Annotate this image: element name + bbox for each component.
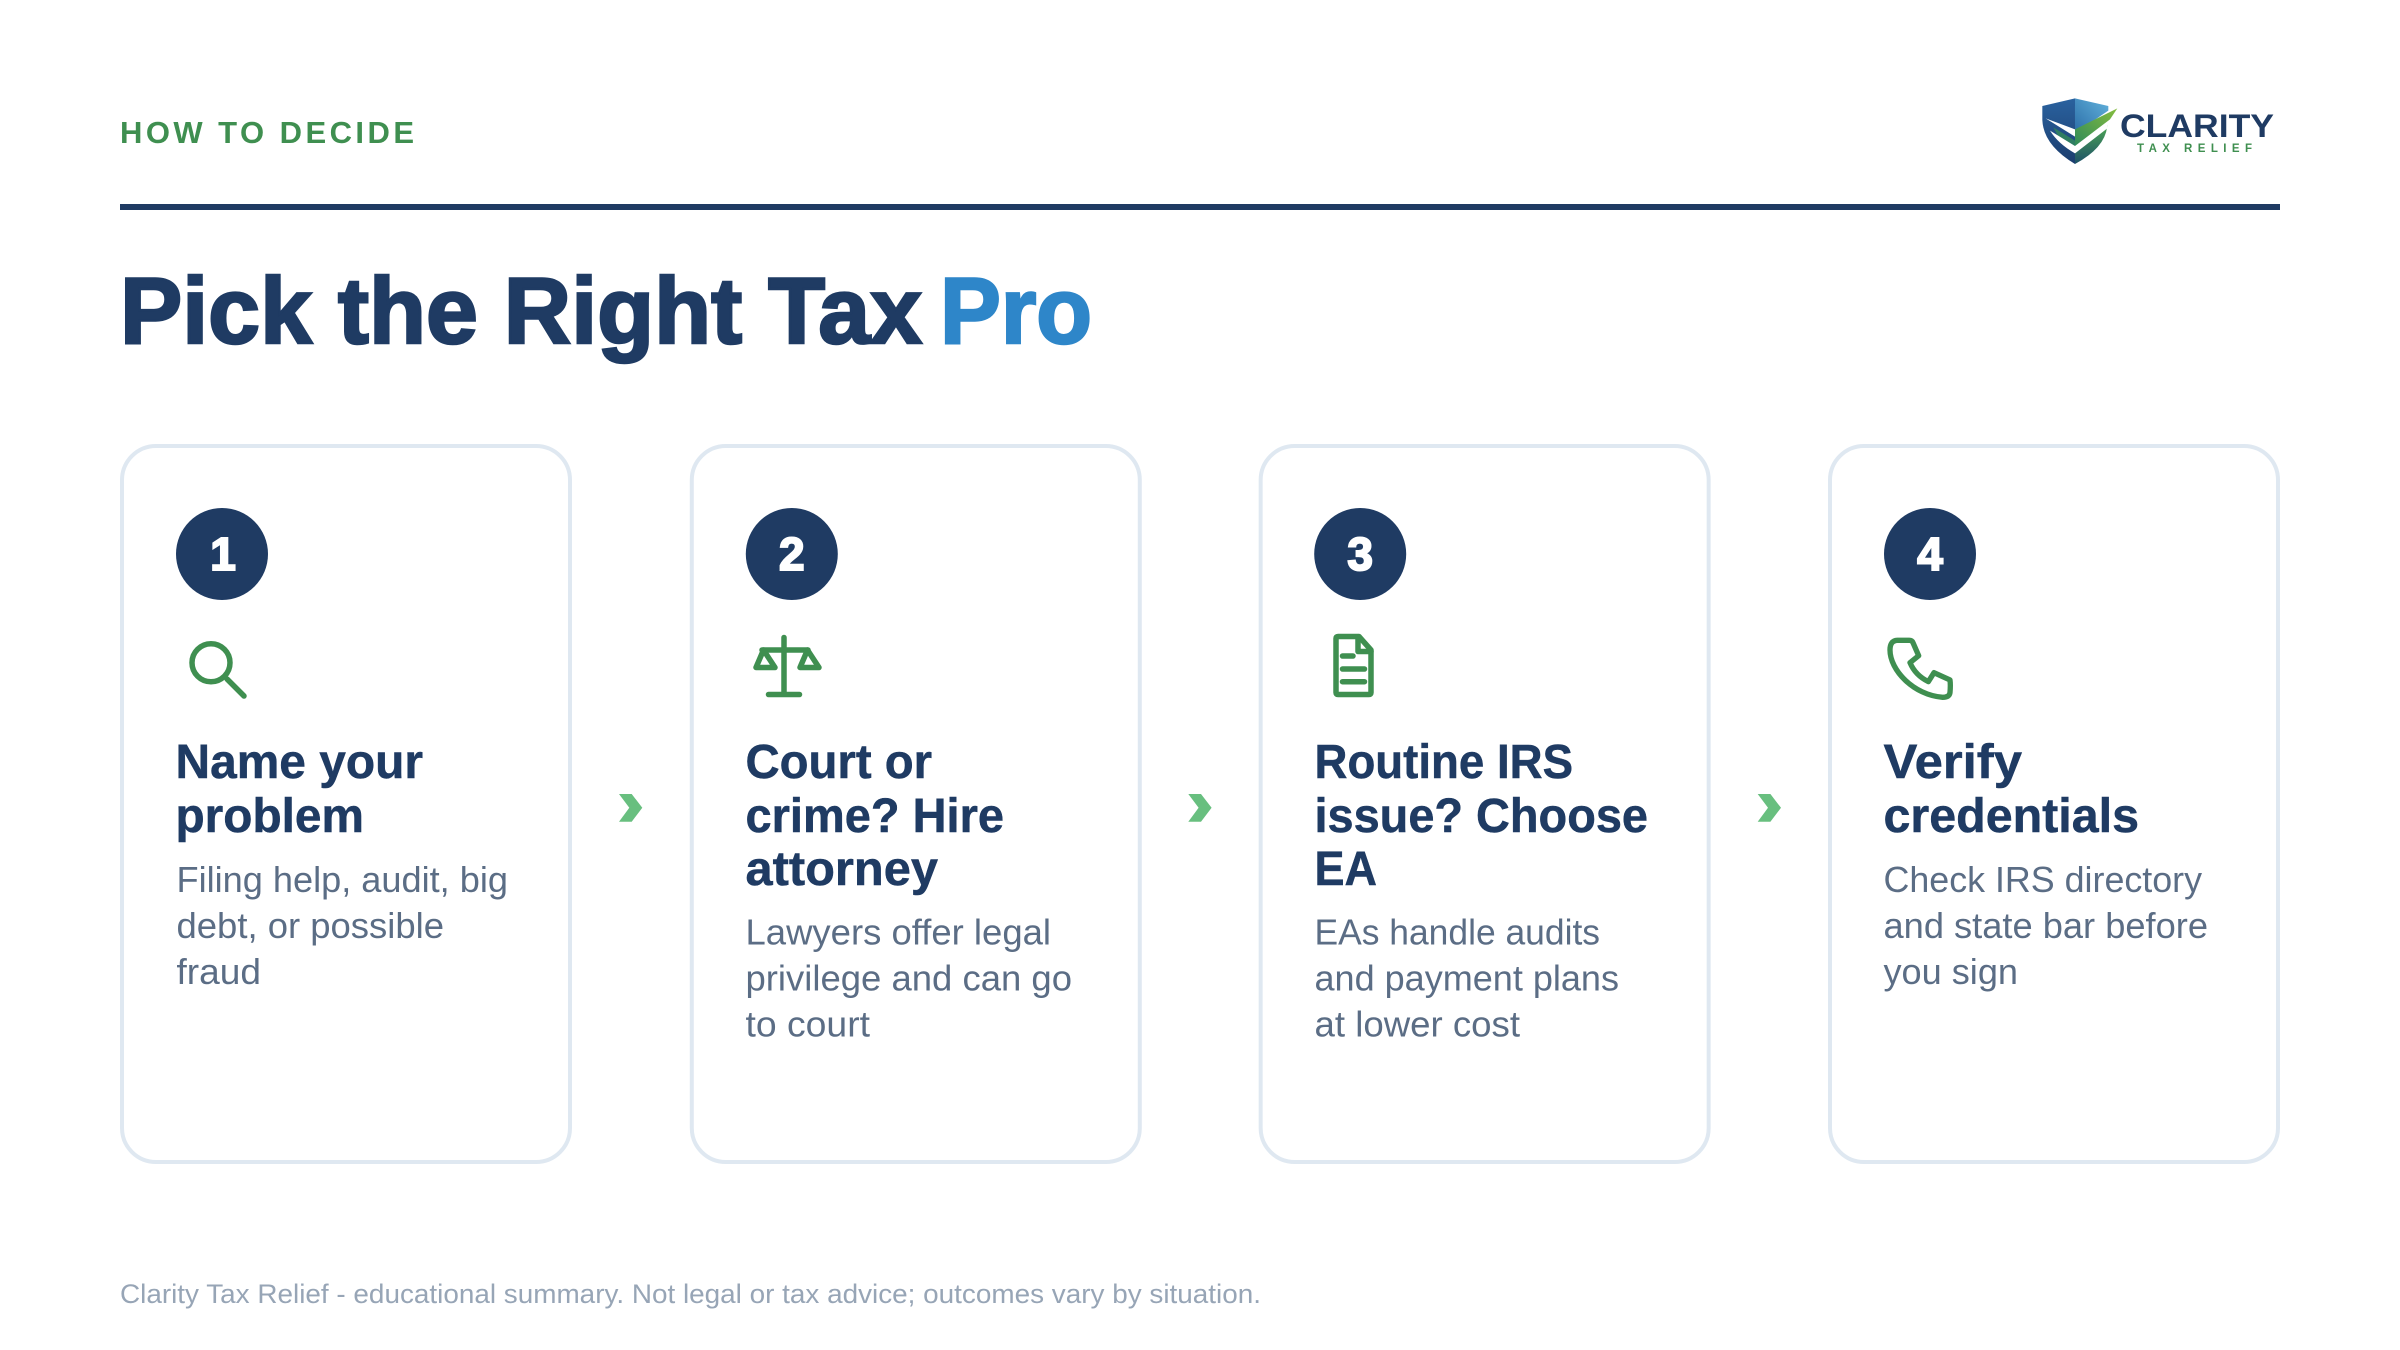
step 1 description xyxy=(176,859,508,992)
step 4 heading: Verify xyxy=(1884,736,2022,789)
step 3 heading xyxy=(1314,736,1648,896)
step 2 heading xyxy=(746,736,1004,896)
icon: phone xyxy=(1890,640,1950,697)
step 3 heading: Routine IRS xyxy=(1314,736,1573,789)
step 2 heading: Court or xyxy=(746,736,932,789)
step 1 description: Filing help, audit, big xyxy=(176,859,508,900)
step 1 heading: Name your xyxy=(176,736,423,789)
number badge 1 xyxy=(176,508,268,600)
step 4 description: Check IRS directory xyxy=(1884,859,2202,900)
header rule xyxy=(120,204,2280,210)
step 1 heading xyxy=(176,736,423,843)
footer disclaimer: Clarity Tax Relief - educational summary. Not legal or tax advice; outcomes vary by situation. xyxy=(120,1279,1261,1309)
icon: balance scales xyxy=(756,638,819,694)
number badge 4: 4 xyxy=(1917,528,1943,580)
step 2 heading: crime? Hire xyxy=(746,790,1004,843)
step 3 description: and payment plans xyxy=(1314,958,1619,998)
title: Pick the Right Tax xyxy=(120,258,922,363)
panel: step 4 xyxy=(1830,446,2278,1162)
step 4 description xyxy=(1884,859,2208,992)
icon: document xyxy=(1336,636,1371,694)
step 1 description: debt, or possible xyxy=(176,905,444,946)
arrow 1 xyxy=(619,794,642,822)
number badge 4 xyxy=(1884,508,1976,600)
number badge 2 xyxy=(746,508,838,600)
panel: step 1 xyxy=(122,446,570,1162)
step 3 description xyxy=(1314,912,1619,1044)
step 4 heading: credentials xyxy=(1884,790,2139,843)
number badge 3: 3 xyxy=(1347,528,1373,580)
logo tagline: TAX RELIEF xyxy=(2137,143,2252,155)
icon: shield with check xyxy=(2042,98,2117,164)
step 3 heading: issue? Choose xyxy=(1314,790,1648,843)
step 3 description: EAs handle audits xyxy=(1314,912,1600,952)
step 2 description xyxy=(746,912,1072,1044)
panel: step 2 xyxy=(692,446,1140,1162)
logo: Clarity Tax Relief xyxy=(2042,98,2274,164)
step 4 description: and state bar before xyxy=(1884,905,2208,946)
step 4 heading xyxy=(1884,736,2139,843)
panel: step 3 xyxy=(1261,446,1709,1162)
step 3 description: at lower cost xyxy=(1314,1004,1520,1044)
eyebrow label: HOW TO DECIDE xyxy=(120,115,414,150)
step 4 description: you sign xyxy=(1884,951,2018,992)
number badge 2: 2 xyxy=(779,528,805,580)
logo wordmark: CLARITY xyxy=(2120,108,2274,144)
step 2 description: privilege and can go xyxy=(746,958,1072,998)
icon: magnifying glass xyxy=(192,644,244,696)
arrow 2 xyxy=(1188,794,1212,822)
step 1 description: fraud xyxy=(176,951,261,992)
number badge 3 xyxy=(1314,508,1406,600)
step 1 heading: problem xyxy=(176,790,364,843)
step 2 description: Lawyers offer legal xyxy=(746,912,1051,952)
step 2 heading: attorney xyxy=(746,843,938,896)
step 2 description: to court xyxy=(746,1004,870,1044)
step 3 heading: EA xyxy=(1314,843,1377,896)
number badge 1: 1 xyxy=(210,528,236,580)
arrow 3 xyxy=(1758,794,1781,822)
title: Pro xyxy=(940,258,1092,363)
